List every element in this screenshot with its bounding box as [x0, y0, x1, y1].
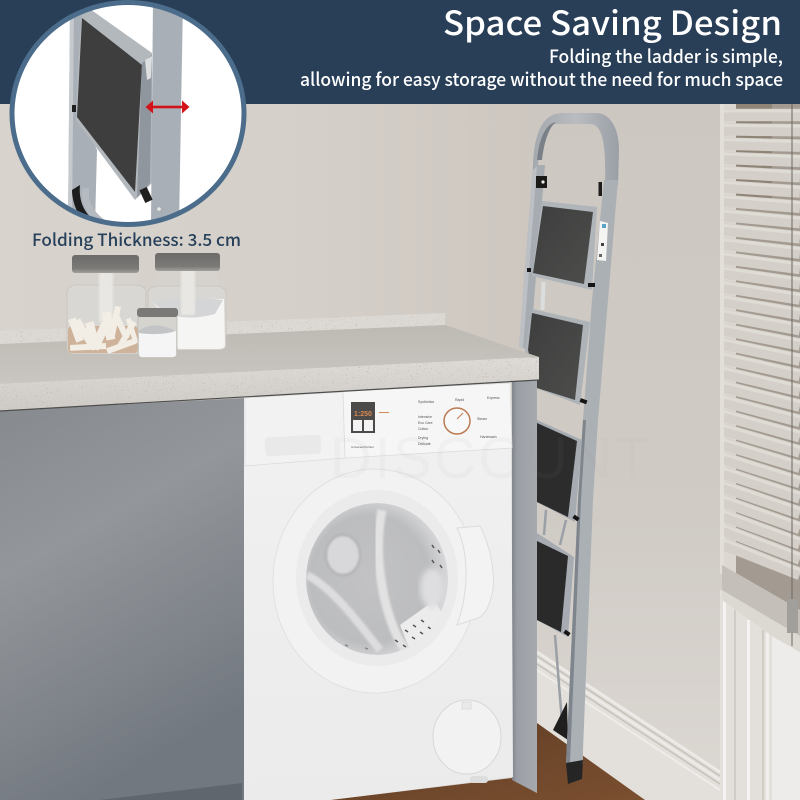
- control panel: [343, 383, 512, 458]
- window casing below blinds: [720, 590, 800, 800]
- jar with white powder: [148, 253, 226, 350]
- black hinge: [536, 176, 547, 188]
- header banner: [0, 0, 800, 104]
- washing machine: [244, 382, 513, 800]
- washer foot: [470, 776, 488, 783]
- storage jars: [67, 253, 226, 358]
- folding thickness label: Folding Thickness: 3.5 cm: [32, 226, 241, 251]
- ladder arch handle: [533, 113, 619, 185]
- step 4: [537, 533, 574, 637]
- panel labels: Drying: [418, 436, 428, 440]
- small jar: [137, 308, 178, 358]
- panel labels: Express: [487, 396, 500, 400]
- panel labels: Cotton: [418, 427, 428, 431]
- filter cover: [433, 700, 501, 774]
- panel labels: Rapid: [455, 398, 464, 402]
- side panel of the cabinet: [512, 378, 537, 793]
- wooden floor: [330, 723, 645, 800]
- wood chips: [68, 306, 139, 354]
- ladder right rail: [566, 180, 618, 764]
- subtitle: Folding the ladder is simple,: [549, 43, 783, 69]
- ladder back legs and braces: [541, 282, 568, 740]
- step 2: [525, 309, 590, 405]
- detergent drawer: [245, 392, 345, 466]
- red thickness arrow: [146, 100, 190, 114]
- panel labels: [351, 396, 500, 449]
- countertop: [0, 313, 540, 412]
- panel labels: Intensive: [418, 415, 432, 419]
- magnified detail inset: [12, 0, 244, 225]
- splashback strip: [0, 313, 445, 344]
- inset ring: [12, 2, 244, 224]
- subtitle: [300, 43, 783, 92]
- ladder left rail: [519, 165, 545, 350]
- counter top surface: [0, 325, 539, 384]
- blind cord: [787, 104, 798, 646]
- inset ladder close-up: [68, 0, 183, 225]
- step 3: [537, 420, 582, 522]
- jar with wood chips: [67, 255, 146, 354]
- skirting board: [537, 650, 720, 800]
- subtitle: allowing for easy storage without the need for much space: [300, 66, 783, 92]
- panel labels: Synthetics: [418, 400, 434, 404]
- ladder foot: [566, 760, 583, 784]
- programme dial: [444, 408, 470, 434]
- panel labels: Universal Perfect: [351, 445, 374, 449]
- door ring: [273, 469, 477, 693]
- background wall: [0, 100, 724, 800]
- digital display: 1:250: [354, 411, 372, 418]
- panel labels: Eco Care: [418, 421, 433, 425]
- step 1: [527, 201, 597, 290]
- window blinds: [720, 104, 800, 800]
- panel labels: Delicate: [418, 442, 431, 446]
- panel labels: Steam: [477, 417, 487, 421]
- digital display: [351, 402, 375, 433]
- faint watermark: DISCOUNT: [330, 426, 650, 491]
- blind bottom rail: [722, 565, 800, 652]
- step ladder: [519, 113, 619, 784]
- grey cabinet door: [0, 398, 245, 800]
- door glass and drum: [306, 503, 448, 655]
- panel labels: Handwash: [480, 435, 497, 439]
- door handle: [457, 526, 493, 625]
- counter front edge: [0, 357, 539, 412]
- safety label: [597, 221, 608, 261]
